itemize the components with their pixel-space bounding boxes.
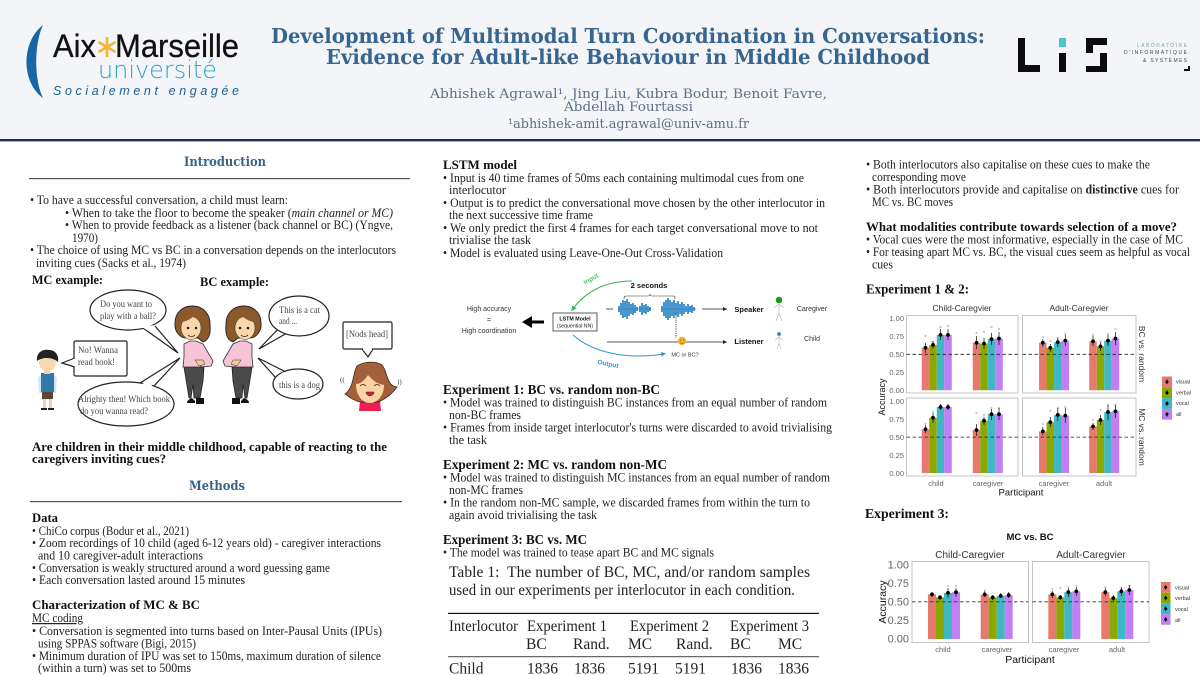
text block: data: • ChiCo corpus (Bodur et al., 2021): [32, 524, 189, 538]
text block: modalities: [866, 219, 1190, 272]
chart: experiments 1 and 2 accuracy: 0.75: [889, 332, 904, 341]
chart legend: all: [1176, 412, 1182, 418]
table caption: [449, 564, 810, 599]
speech bubble: nods head: [343, 322, 392, 357]
text block: introduction bullets: • When to provide feedback as a listener (back channel or BC) (Yngve,: [65, 218, 393, 232]
diagram: LSTM model pipeline: =: [487, 317, 491, 324]
chart: experiment 3 accuracy: Participant: [1005, 654, 1055, 666]
speech bubble: child reply: [62, 341, 127, 376]
chart legend: verbal: [1176, 390, 1191, 396]
chart: experiment 3 accuracy: [877, 532, 1190, 666]
table 1: sample counts: Rand.: [676, 636, 713, 653]
character: boy: [37, 350, 58, 410]
text block: introduction bullets: • To have a successful conversation, a child must learn:: [30, 193, 288, 207]
logo: Aix-Marseille Université: Aix: [53, 28, 96, 64]
panel: results: [865, 158, 1191, 666]
text block: introduction bullets: inviting cues (Sacks et al., 1974): [36, 256, 186, 270]
speech bubble: this is a cat: [259, 296, 329, 349]
text block: introduction bullets: [30, 193, 396, 270]
chart: experiment 3 accuracy: 0.75: [888, 578, 909, 590]
speech bubble: this is a dog: [258, 358, 323, 399]
chart legend: vocal: [1175, 607, 1188, 613]
chart: experiment 3 accuracy: MC vs. BC: [1007, 532, 1054, 543]
speech bubble: this is a cat: This is a cat: [279, 306, 320, 316]
chart legend: visual: [1175, 586, 1189, 592]
character: nodding girl: )): [397, 378, 402, 386]
icon: caregiver figure: [774, 297, 828, 321]
text block: experiment 1: the task: [449, 433, 488, 447]
text block: cue capitalisation: corresponding move: [872, 170, 966, 184]
heading: introduction: Introduction: [184, 155, 266, 170]
text block: experiment 2: Experiment 2: MC vs. random non-MC: [443, 458, 667, 473]
text block: data: • Conversation is weakly structured around a word guessing game: [32, 561, 330, 575]
text block: characterization of MC and BC: • Conversation is segmented into turns based on Inter-Pausal Units (IPUs): [32, 624, 382, 638]
chart legend: all: [1175, 618, 1181, 624]
illustration: MC and BC examples: [32, 272, 402, 426]
speech bubble: child reply: No! Wanna: [78, 346, 119, 356]
text block: experiment 1: Experiment 1: BC vs. random non-BC: [443, 383, 660, 398]
character: caregiver speaking MC: [175, 306, 213, 404]
text block: characterization of MC and BC: MC coding: [32, 611, 84, 625]
chart: experiments 1 and 2 accuracy: child: [928, 479, 944, 488]
text block: characterization of MC and BC: • Minimum duration of IPU was set to 150ms, maximum duration of silence: [32, 649, 381, 663]
text block: data: Data: [32, 510, 58, 525]
chart: experiment 3 accuracy: 0.25: [888, 615, 909, 627]
text block: data: • Zoom recordings of 10 child (aged 6-12 years old) - caregiver interactions: [32, 536, 381, 550]
chart: experiments 1 and 2 accuracy: 1.00: [889, 314, 904, 323]
chart: experiment 3 accuracy: 0.50: [888, 596, 909, 608]
box: LSTM model: (sequential NN): [557, 324, 593, 330]
table caption: Table 1: The number of BC, MC, and/or random samples: [449, 564, 810, 581]
chart: experiments 1 and 2 accuracy: caregiver: [973, 479, 1004, 488]
text block: experiment 1: • Model was trained to distinguish BC instances from an equal number of random: [443, 396, 827, 410]
arrow: output: [573, 335, 666, 370]
chart: experiments 1 and 2 accuracy: 0.75: [889, 415, 904, 424]
chart: experiments 1 and 2 accuracy: MC vs. random: [1137, 408, 1147, 466]
listener track: [607, 313, 764, 358]
heading: experiment 3: Experiment 3:: [865, 507, 949, 522]
research question: caregivers inviting cues?: [32, 451, 166, 466]
table 1: sample counts: MC: [628, 636, 652, 653]
text block: experiment 3: [443, 533, 714, 560]
table 1: sample counts: Experiment 2: [630, 618, 709, 635]
diagram: LSTM model pipeline: High coordination: [462, 328, 516, 335]
chart: experiments 1 and 2 accuracy: 0.50: [889, 433, 904, 442]
logo: Aix-Marseille Université: Socialement engagée: [53, 84, 239, 98]
logo: LIS laboratory: [1018, 38, 1190, 72]
arrow: output: Output: [597, 359, 620, 370]
text block: cue capitalisation: • Both interlocutors also capitalise on these cues to make the: [866, 158, 1150, 172]
chart: experiments 1 and 2 accuracy: Adult-Caregvier: [1049, 303, 1109, 313]
text block: introduction bullets: • When to take the floor to become the speaker (main channel or MC): [65, 206, 393, 220]
title: Evidence for Adult-like Behaviour in Middle Childhood: [326, 45, 930, 69]
text block: characterization of MC and BC: using SPPAS software (Bigi, 2015): [38, 636, 196, 650]
speech bubble: which book: Alrighty then! Which book: [78, 395, 170, 405]
chart legend: verbal: [1175, 596, 1190, 602]
speaker waveform: [606, 281, 764, 320]
text block: modalities: cues: [872, 258, 893, 272]
arrow: result: [522, 316, 544, 328]
table 1: sample counts: Interlocutor: [449, 618, 519, 635]
speech bubble: which book: do you wanna read?: [80, 407, 148, 417]
text block: modalities: What modalities contribute towards selection of a move?: [866, 219, 1177, 234]
icon: caregiver figure: Caregiver: [797, 306, 828, 313]
speech bubble: ball question: play with a ball?: [100, 312, 156, 322]
chart: experiments 1 and 2 accuracy: Participant: [999, 488, 1044, 498]
text block: experiment 1: • Frames from inside target interlocutor's turns were discarded to avoid trivialising: [443, 420, 833, 434]
text block: experiment 1: non-BC frames: [449, 408, 521, 422]
text block: introduction bullets: 1970): [72, 231, 98, 245]
text block: cue capitalisation: [866, 158, 1180, 209]
text block: characterization of MC and BC: Characterization of MC & BC: [32, 597, 200, 612]
speech bubble: this is a dog: this is a dog: [279, 381, 320, 391]
character: nodding girl: ((: [340, 376, 345, 384]
chart: experiments 1 and 2 accuracy: caregiver: [1039, 479, 1070, 488]
chart: experiments 1 and 2 accuracy: 0.50: [889, 350, 904, 359]
chart: experiments 1 and 2 accuracy: Accuracy: [877, 378, 887, 416]
chart: experiment 3 accuracy: Child-Caregvier: [935, 550, 1005, 561]
text block: LSTM model: the next successive time frame: [449, 208, 593, 222]
speech bubble: nods head: [Nods head]: [346, 330, 388, 340]
text block: experiment 3: • The model was trained to tease apart BC and MC signals: [443, 546, 714, 560]
arrow: input: Input: [583, 272, 601, 286]
icon: child figure: [775, 332, 820, 349]
table caption: used in our experiments per interlocutor in each condition.: [449, 582, 795, 599]
text block: experiment 2: again avoid trivialising the task: [449, 508, 598, 522]
table 1: sample counts: BC: [526, 636, 547, 653]
logo: Aix-Marseille Université: Marseille: [115, 28, 239, 64]
text block: LSTM model: • We only predict the first 4 frames for each target conversational move to not: [443, 221, 818, 235]
authors: Abhishek Agrawal¹, Jing Liu, Kubra Bodur, Benoit Favre,: [429, 87, 827, 102]
chart: experiments 1 and 2 accuracy: 0.25: [889, 451, 904, 460]
chart legend: [1162, 376, 1191, 420]
character: nodding girl: [340, 362, 402, 411]
logo: Aix-Marseille Université: université: [98, 56, 217, 84]
table 1: sample counts: MC: [778, 636, 802, 653]
text block: characterization of MC and BC: (within a turn) was set to 500ms: [38, 661, 191, 675]
text block: LSTM model: trivialise the task: [449, 233, 532, 247]
chart: experiment 3 accuracy: 1.00: [888, 560, 909, 572]
chart: experiment 3 accuracy: child: [935, 645, 951, 654]
panel: LSTM model: [443, 157, 833, 675]
table 1: sample counts: [448, 564, 819, 675]
chart: experiment 3 accuracy: adult: [1109, 645, 1126, 654]
illustration: MC and BC examples: BC example:: [200, 274, 269, 289]
chart: experiments 1 and 2 accuracy: 0.00: [889, 469, 904, 478]
title: [271, 24, 985, 69]
chart legend: vocal: [1176, 401, 1189, 407]
table 1: sample counts: Experiment 1: [527, 618, 607, 635]
heading: experiment 1 and 2: Experiment 1 & 2:: [866, 282, 969, 298]
panel: methods: [30, 479, 402, 675]
authors: ¹abhishek-amit.agrawal@univ-amu.fr: [508, 117, 750, 132]
icon: child figure: Child: [804, 336, 820, 343]
text block: cue capitalisation: • Both interlocutors provide and capitalise on distinctive cues for: [866, 182, 1180, 196]
text block: LSTM model: [443, 157, 826, 260]
chart: experiment 3 accuracy: caregiver: [982, 645, 1013, 654]
panel: introduction: [29, 155, 410, 466]
text block: data: • Each conversation lasted around 15 minutes: [32, 573, 245, 587]
chart: experiment 3 accuracy: caregiver: [1049, 645, 1080, 654]
authors: [429, 87, 827, 132]
text block: LSTM model: LSTM model: [443, 157, 517, 172]
illustration: MC and BC examples: MC example:: [32, 272, 103, 287]
logo: LIS laboratory: LABORATOIRE: [1137, 43, 1188, 49]
logo: LIS laboratory: D'INFORMATIQUE: [1124, 50, 1188, 56]
speaker waveform: Speaker: [734, 305, 764, 314]
box: LSTM model: [553, 313, 597, 331]
header band: [0, 0, 1200, 141]
table 1: sample counts: BC: [730, 636, 751, 653]
box: LSTM model: LSTM Model: [559, 316, 591, 322]
research question: [32, 439, 387, 466]
speech bubble: child reply: read book!: [78, 358, 115, 368]
text block: LSTM model: • Model is evaluated using Leave-One-Out Cross-Validation: [443, 246, 724, 260]
text block: introduction bullets: • The choice of using MC vs BC in a conversation depends on the interlocutors: [30, 243, 396, 257]
research question: Are children in their middle childhood, capable of reacting to the: [32, 439, 387, 454]
text block: experiment 2: non-MC frames: [449, 483, 523, 497]
text block: LSTM model: • Input is 40 time frames of 50ms each containing multimodal cues from one: [443, 171, 804, 185]
diagram: LSTM model pipeline: High accuracy: [467, 306, 512, 313]
speech bubble: ball question: [90, 290, 178, 353]
chart: experiments 1 and 2 accuracy: 0.25: [889, 368, 904, 377]
text block: experiment 3: Experiment 3: BC vs. MC: [443, 533, 587, 548]
table 1: sample counts: Rand.: [573, 636, 610, 653]
chart: experiment 3 accuracy: 0.00: [888, 634, 909, 646]
chart legend: visual: [1176, 380, 1190, 386]
text block: experiment 2: • In the random non-MC sample, we discarded frames from within the turn to: [443, 496, 810, 510]
authors: Abdellah Fourtassi: [563, 100, 693, 115]
listener track: MC or BC?: [671, 352, 699, 358]
logo: LIS laboratory: & SYSTÈMES: [1143, 57, 1188, 64]
chart: experiments 1 and 2 accuracy: BC vs. random: [1137, 326, 1147, 382]
character: caregiver speaking BC: [223, 306, 261, 404]
logo: Aix-Marseille Université: [26, 25, 239, 98]
text block: cue capitalisation: MC vs. BC moves: [872, 195, 953, 209]
title: Development of Multimodal Turn Coordination in Conversations:: [271, 24, 985, 48]
chart: experiments 1 and 2 accuracy: 1.00: [889, 397, 904, 406]
text block: data: and 10 caregiver-adult interactions: [38, 548, 203, 562]
text block: data: [32, 510, 381, 587]
arrow: input: [571, 272, 632, 311]
text block: LSTM model: • Output is to predict the conversational move chosen by the other interlocutor in: [443, 196, 826, 210]
chart: experiments 1 and 2 accuracy: adult: [1096, 479, 1113, 488]
listener track: Listener: [734, 337, 764, 346]
speech bubble: which book: [78, 358, 180, 426]
text block: LSTM model: interlocutor: [449, 183, 507, 197]
chart: experiments 1 and 2 accuracy: 0.00: [889, 386, 904, 395]
text block: characterization of MC and BC: [32, 597, 382, 675]
heading: methods: Methods: [189, 479, 245, 494]
text block: experiment 2: • Model was trained to distinguish MC instances from an equal number of random: [443, 470, 830, 484]
text block: experiment 1: [443, 383, 833, 447]
text block: experiment 2: [443, 458, 830, 522]
chart: experiments 1 and 2 accuracy: [877, 303, 1191, 498]
chart: experiment 3 accuracy: Accuracy: [877, 580, 889, 624]
table 1: sample counts: Experiment 3: [730, 618, 809, 635]
speech bubble: ball question: Do you want to: [100, 300, 152, 310]
text block: modalities: • Vocal cues were the most informative, especially in the case of MC: [866, 232, 1183, 246]
speaker waveform: 2 seconds: [631, 281, 667, 290]
diagram: LSTM model pipeline: [462, 272, 828, 370]
chart: experiment 3 accuracy: Adult-Caregvier: [1056, 550, 1126, 561]
chart legend: [1161, 582, 1190, 625]
chart: experiments 1 and 2 accuracy: Child-Caregvier: [932, 303, 992, 313]
speech bubble: this is a cat: and ...: [279, 317, 297, 327]
